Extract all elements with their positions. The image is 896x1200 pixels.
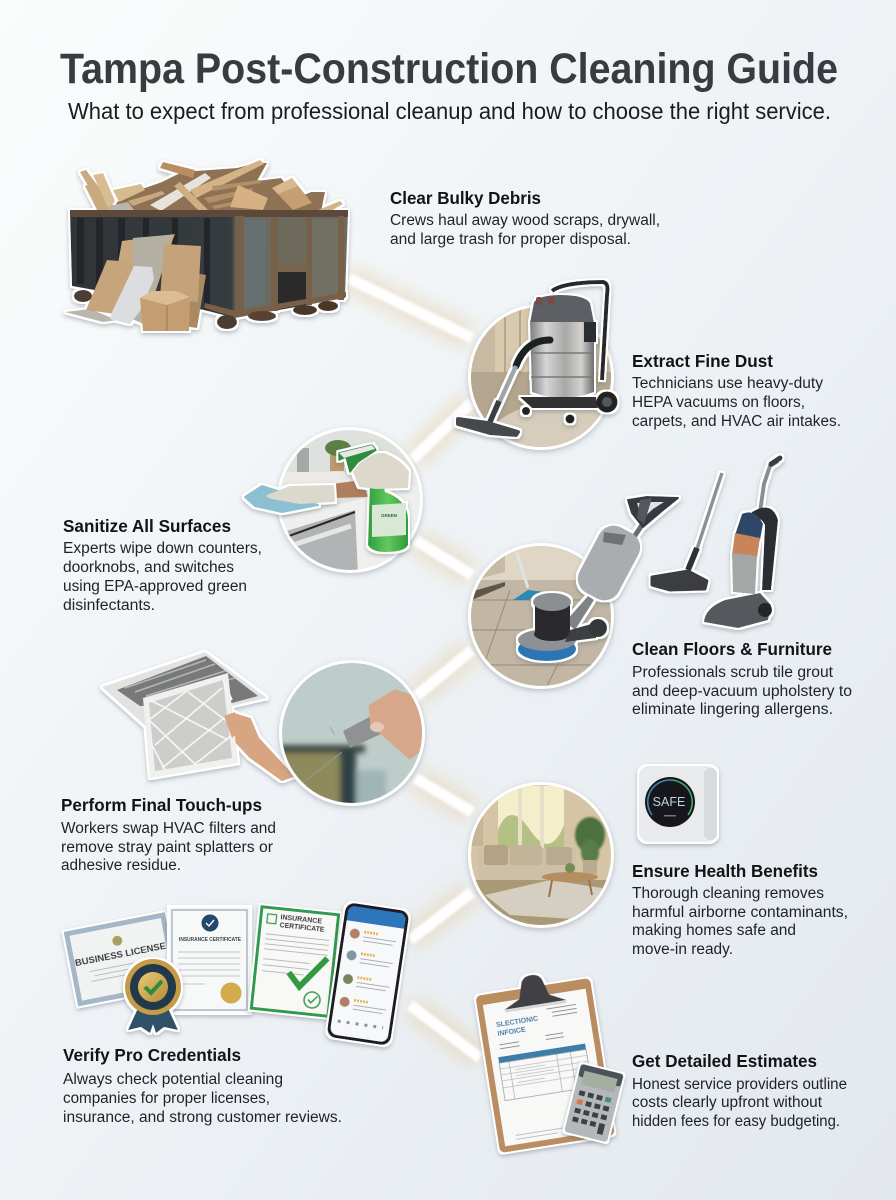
text: perform final touch-ups — [61, 795, 276, 874]
text: extract fine dust — [632, 351, 841, 430]
text: extract fine dust: Technicians use heavy-duty — [632, 375, 823, 392]
text: get detailed estimates: hidden fees for easy budgeting. — [632, 1113, 840, 1130]
text: verify pro credentials — [63, 1045, 342, 1126]
document: insurance certificate — [169, 907, 250, 1013]
illustration: clipboard with estimate: SLECTIONIC — [496, 1016, 539, 1029]
document: insurance certificate: INSURANCE CERTIFICATE — [179, 937, 241, 943]
drywall sheets and box — [65, 309, 117, 322]
document: green insurance certificate: CERTIFICATE — [279, 922, 325, 934]
text: get detailed estimates: Honest service providers outline — [632, 1076, 847, 1093]
text: perform final touch-ups: adhesive residue. — [61, 857, 181, 874]
text: ensure health benefits — [632, 861, 848, 958]
text: clean floors and furniture — [632, 639, 852, 718]
text: ensure health benefits: harmful airborne contaminants, — [632, 904, 848, 921]
photo circle: razor scraper on glass — [275, 655, 430, 815]
label on spray bottle: GREEN — [381, 513, 397, 518]
illustration: clipboard with estimate: INFOICE — [497, 1027, 527, 1038]
text: extract fine dust: Extract Fine Dust — [632, 351, 773, 371]
illustration: floor scrubbing machine — [518, 497, 678, 661]
illustration: HEPA wet dry vacuum — [458, 282, 618, 435]
illustration: phone with customer reviews — [326, 902, 410, 1046]
text: clean floors and furniture: Professionals scrub tile grout — [632, 664, 834, 681]
connector paths — [348, 278, 480, 1058]
text: verify pro credentials: companies for proper licenses, — [63, 1090, 270, 1107]
step: clean floors and furniture — [465, 458, 852, 718]
text: verify pro credentials: Verify Pro Credentials — [63, 1045, 241, 1065]
text: ensure health benefits: Ensure Health Benefits — [632, 861, 818, 881]
text: clear bulky debris: Crews haul away wood scraps, drywall, — [390, 212, 660, 229]
dumpster body — [70, 212, 348, 318]
step: clear bulky debris — [65, 160, 660, 331]
text: clean floors and furniture: Clean Floors & Furniture — [632, 639, 832, 659]
monitor reading: SAFE — [653, 795, 685, 809]
text: sanitize all surfaces: Sanitize All Surfaces — [63, 516, 231, 536]
text: ensure health benefits: Thorough cleaning removes — [632, 885, 824, 902]
illustration: stick vacuum — [652, 473, 722, 590]
title: Tampa Post-Construction Cleaning Guide — [60, 45, 838, 93]
text: clean floors and furniture: eliminate lingering allergens. — [632, 701, 833, 718]
photo circle: bright living room — [465, 780, 620, 935]
text: ensure health benefits: move-in ready. — [632, 941, 733, 958]
photo circle: room behind vacuum — [465, 300, 615, 457]
document: green insurance certificate — [250, 905, 340, 1018]
text: verify pro credentials: Always check potential cleaning — [63, 1071, 283, 1088]
document: green insurance certificate: INSURANCE — [280, 914, 323, 926]
illustration: clipboard with estimate — [473, 966, 615, 1153]
step: extract fine dust — [458, 282, 841, 457]
text: get detailed estimates: Get Detailed Estimates — [632, 1051, 817, 1071]
document: business license — [64, 912, 179, 1006]
text: extract fine dust: HEPA vacuums on floors, — [632, 394, 805, 411]
photo circle: tile floor — [465, 540, 615, 690]
step: get detailed estimates — [473, 966, 847, 1153]
step: verify pro credentials — [63, 902, 410, 1126]
illustration: gloved hand, cloth and green spray bottle — [245, 445, 408, 552]
text: get detailed estimates: costs clearly upfront without — [632, 1094, 823, 1111]
text: perform final touch-ups: remove stray paint splatters or — [61, 839, 273, 856]
text: sanitize all surfaces: Experts wipe down counters, — [63, 540, 262, 557]
text: clear bulky debris — [390, 188, 660, 248]
subtitle: What to expect from professional cleanup and how to choose the right service. — [68, 98, 831, 124]
step: sanitize all surfaces — [63, 425, 425, 614]
text: clean floors and furniture: and deep-vacuum upholstery to — [632, 683, 852, 700]
illustration: dumpster with debris — [65, 160, 348, 331]
text: sanitize all surfaces: using EPA-approved green — [63, 578, 247, 595]
text: clear bulky debris: Clear Bulky Debris — [390, 188, 541, 208]
text: sanitize all surfaces: disinfectants. — [63, 597, 155, 614]
icon: safe air quality monitor — [639, 766, 717, 842]
icon: rosette verification badge — [125, 959, 181, 1033]
text: get detailed estimates — [632, 1051, 847, 1130]
text: perform final touch-ups: Workers swap HVAC filters and — [61, 820, 276, 837]
photo circle: kitchen wiping — [275, 425, 425, 575]
illustration: calculator — [564, 1064, 624, 1142]
text: sanitize all surfaces: doorknobs, and switches — [63, 559, 234, 576]
text: ensure health benefits: making homes safe and — [632, 922, 796, 939]
step: ensure health benefits — [465, 766, 848, 958]
document: business license: BUSINESS LICENSE — [74, 941, 167, 969]
illustration: upright vacuum — [704, 458, 780, 628]
text: perform final touch-ups: Perform Final Touch-ups — [61, 795, 262, 815]
illustration: HVAC vent and filter held by hand — [102, 652, 293, 780]
text: extract fine dust: carpets, and HVAC air intakes. — [632, 413, 841, 430]
text: verify pro credentials: insurance, and strong customer reviews. — [63, 1109, 342, 1126]
text: clear bulky debris: and large trash for proper disposal. — [390, 231, 631, 248]
step: perform final touch-ups — [61, 652, 430, 874]
text: sanitize all surfaces — [63, 516, 262, 614]
